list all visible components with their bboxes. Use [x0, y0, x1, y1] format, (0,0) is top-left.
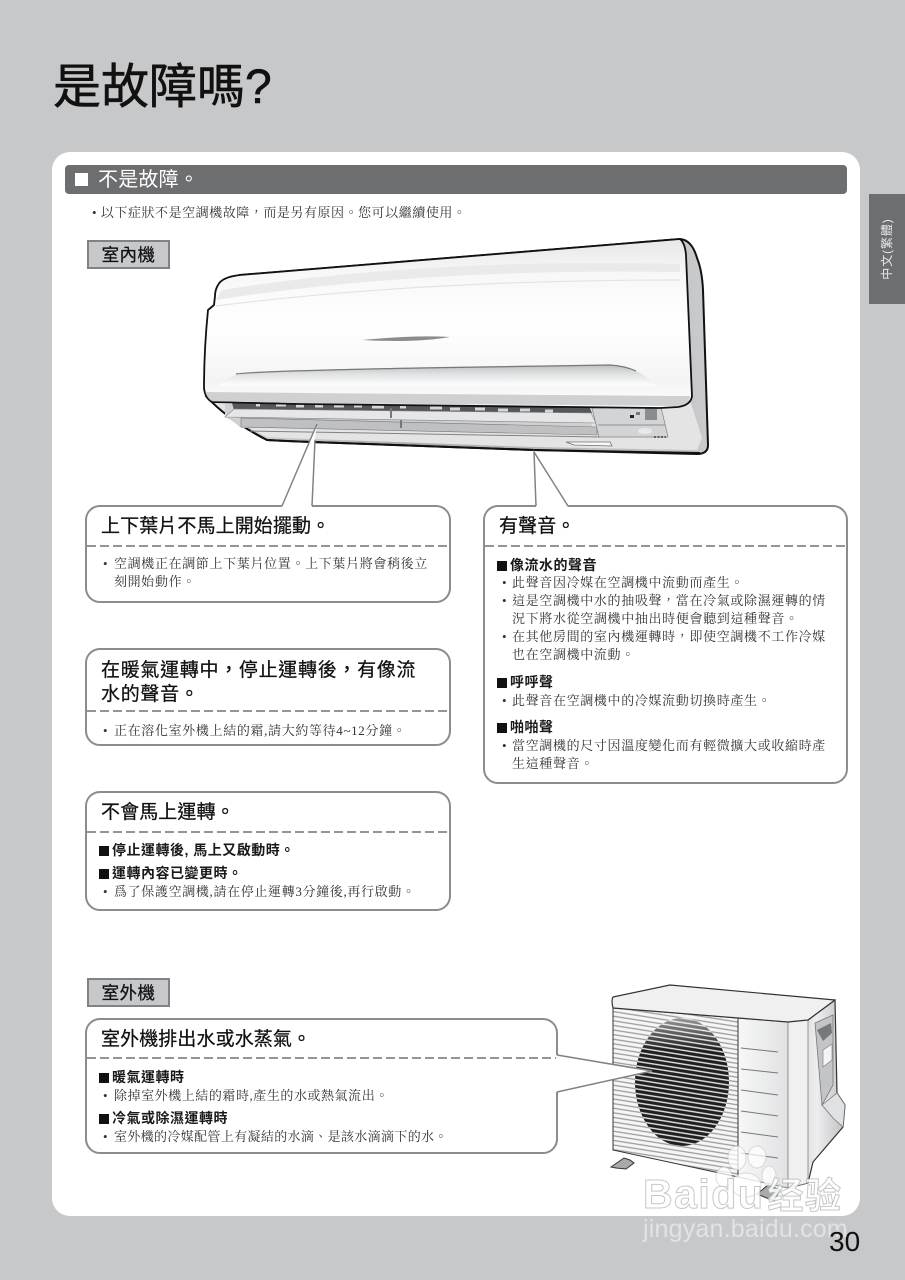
heating explanation: 除掉室外機上結的霜時,產生的水或熱氣流出。 — [114, 1088, 389, 1103]
explanation: • — [502, 575, 507, 590]
title: 是故障嗎? — [53, 61, 272, 114]
explanation: 生這種聲音。 — [512, 756, 594, 771]
control panel — [566, 407, 668, 446]
cooling explanation: 室外機的冷媒配管上有凝結的水滴、是該水滴滴下的水。 — [114, 1129, 448, 1144]
outdoor unit tag: 室外機 — [102, 983, 155, 1003]
watermark paw — [716, 1146, 776, 1198]
dashed divider — [485, 545, 846, 547]
callout heading: 上下葉片不馬上開始擺動。 — [101, 516, 330, 537]
callout body — [103, 556, 428, 589]
subheading: 像流水的聲音 — [510, 557, 597, 573]
explanation: 此聲音在空調機中的冷媒流動切換時產生。 — [512, 693, 771, 708]
illustration: indoor unit — [203, 238, 709, 455]
leader: sounds — [534, 452, 568, 507]
watermark url: jingyan.baidu.com — [643, 1215, 848, 1243]
watermark wordmark: Baidu经验 — [643, 1171, 842, 1217]
watermark — [642, 1146, 848, 1243]
explanation: • — [502, 593, 507, 608]
heading text: 不是故障。 — [98, 169, 199, 191]
callout: vanes do not swing — [85, 505, 451, 603]
explanation: • — [502, 738, 507, 753]
leader line to outdoor unit — [556, 1054, 652, 1092]
callout heading: 室外機排出水或水蒸氣。 — [101, 1029, 311, 1050]
callout: outdoor water or vapor — [85, 1018, 558, 1154]
callout heading: 不會馬上運轉。 — [101, 802, 235, 823]
intro note: • 以下症狀不是空調機故障，而是另有原因。您可以繼續使用。 — [92, 205, 466, 220]
leader: vanes — [282, 424, 317, 507]
language tab label: 中文(繁體) — [880, 218, 894, 280]
callout body: 正在溶化室外機上結的霜,請大約等待4~12分鐘。 — [114, 723, 406, 738]
crackling sound — [497, 719, 826, 771]
front right panel — [738, 1018, 808, 1188]
explanation: 況下將水從空調機中抽出時便會聽到這種聲音。 — [512, 611, 799, 626]
callout body: 刻開始動作。 — [114, 574, 196, 589]
outdoor unit tag — [87, 978, 170, 1007]
page number: 30 — [829, 1226, 860, 1257]
cooling subheading: 冷氣或除濕運轉時 — [112, 1110, 228, 1126]
top cover — [612, 985, 835, 1022]
heating explanation: • — [103, 1088, 108, 1103]
explanation: • — [502, 693, 507, 708]
dashed divider — [87, 545, 449, 547]
callout body: • — [103, 884, 108, 899]
callout heading: 水的聲音。 — [101, 684, 200, 704]
explanation — [502, 575, 826, 662]
language side tab — [869, 194, 905, 304]
dashed divider — [87, 1057, 556, 1059]
heading square icon — [75, 173, 88, 186]
callout body: • — [103, 556, 108, 571]
callout heading — [101, 660, 416, 704]
illustration: outdoor unit — [610, 984, 846, 1202]
front panel — [204, 239, 692, 408]
flowing water sound — [497, 557, 826, 662]
explanation: 在其他房間的室內機運轉時，即使空調機不工作冷媒 — [512, 629, 826, 644]
leader lines from indoor unit to callouts — [282, 424, 568, 507]
explanation: 也在空調機中流動。 — [512, 647, 635, 662]
subheading: 啪啪聲 — [510, 719, 554, 735]
explanation: 這是空調機中水的抽吸聲，當在冷氣或除濕運轉的情 — [512, 593, 826, 608]
section heading bar — [65, 165, 847, 194]
subheading: 呼呼聲 — [510, 674, 554, 690]
condition one: 停止運轉後, 馬上又啟動時。 — [112, 842, 295, 858]
explanation: 此聲音因冷媒在空調機中流動而產生。 — [512, 575, 744, 590]
callout: sounds — [483, 505, 848, 784]
unit body — [206, 239, 708, 454]
callout heading: 有聲音。 — [499, 516, 575, 537]
callout: does not start immediately — [85, 791, 451, 911]
explanation: • — [502, 629, 507, 644]
dashed divider — [87, 710, 449, 712]
condition two: 運轉內容已變更時。 — [112, 865, 242, 881]
callout body: • — [103, 723, 108, 738]
explanation — [502, 738, 826, 771]
feet — [611, 1158, 780, 1201]
fan grille — [613, 1008, 738, 1177]
callout: water sound after heating — [85, 648, 451, 746]
air outlet — [225, 403, 600, 437]
indoor unit tag — [87, 240, 170, 269]
indoor unit tag: 室內機 — [102, 245, 155, 265]
side panel — [788, 1000, 845, 1188]
side handle — [815, 1015, 845, 1127]
callout heading: 在暖氣運轉中，停止運轉後，有像流 — [101, 660, 416, 681]
panel: not a malfunction — [52, 152, 860, 1216]
whooshing sound — [497, 674, 771, 708]
callout body: 爲了保護空調機,請在停止運轉3分鐘後,再行啟動。 — [114, 884, 416, 899]
callout body: 空調機正在調節上下葉片位置。上下葉片將會稍後立 — [114, 556, 428, 571]
dashed divider — [87, 831, 449, 833]
cooling explanation: • — [103, 1129, 108, 1144]
heating subheading: 暖氣運轉時 — [112, 1069, 184, 1085]
explanation: 當空調機的尺寸因溫度變化而有輕微擴大或收縮時產 — [512, 738, 826, 753]
